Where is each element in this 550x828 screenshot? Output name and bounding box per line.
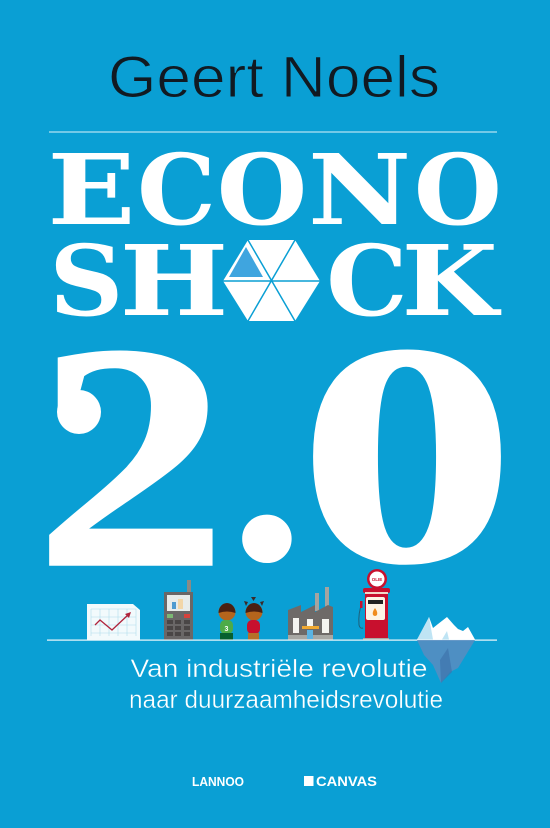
publisher: Lannoo: LANNOO: [192, 775, 244, 789]
author name: Geert Noels: [108, 45, 440, 110]
top rule: [49, 132, 497, 133]
title: ECONO: N: [308, 133, 411, 247]
icon: fuel pump: [359, 569, 390, 640]
subtitle: [129, 655, 443, 714]
title: ECONO: O: [414, 134, 502, 248]
icon: two children: 3: [225, 626, 229, 633]
subtitle: naar duurzaamheidsrevolutie: [129, 686, 443, 714]
icon: iceberg: [417, 617, 475, 683]
title: SHOCK: K: [402, 224, 502, 338]
publisher: Canvas: CANVAS: [316, 774, 377, 789]
title: SHOCK: H: [120, 225, 228, 339]
icon: fuel pump: OLIE: [372, 577, 382, 582]
title: 2.0: .: [230, 301, 304, 622]
title: 2.0: 0: [298, 278, 517, 630]
title: SHOCK: [49, 224, 502, 339]
icon: hexagon replacing the letter O: [223, 240, 320, 321]
title: ECONO: [47, 133, 502, 248]
title: 2.0: 2: [34, 279, 228, 635]
baseline rule: [47, 640, 497, 641]
title: ECONO: C: [137, 134, 216, 248]
subtitle: Van industriële revolutie: [130, 655, 428, 683]
icon: mobile phone: [164, 580, 193, 640]
title: ECONO: O: [217, 133, 307, 247]
title: SHOCK: S: [49, 224, 124, 338]
title: 2.0: [34, 278, 517, 635]
title: SHOCK: C: [326, 224, 408, 338]
icon: two children: [218, 597, 264, 640]
title: ECONO: E: [47, 134, 136, 248]
icon: line chart: [87, 604, 140, 640]
icon: factory: [288, 587, 333, 640]
